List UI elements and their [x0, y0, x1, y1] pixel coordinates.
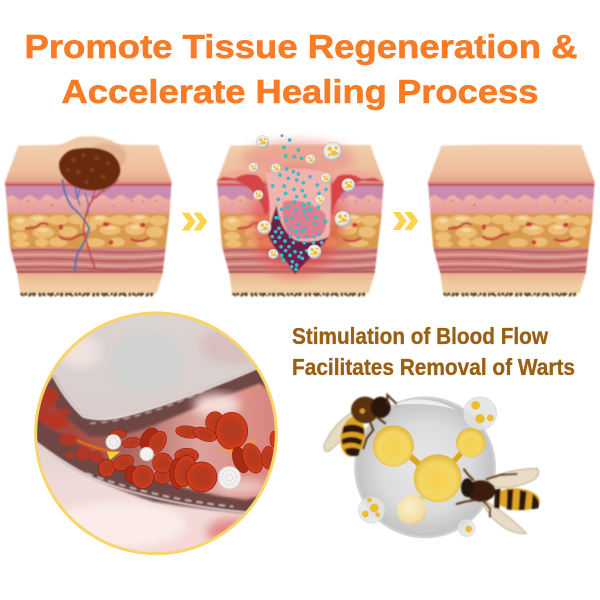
circle border	[36, 313, 276, 554]
large bubble	[354, 397, 496, 538]
vessel wall	[33, 368, 287, 513]
bubbles with gold molecules	[256, 135, 269, 148]
bee top left	[324, 395, 396, 458]
gold molecule	[373, 425, 485, 525]
skin block: wound with active molecules	[212, 134, 389, 296]
lumen	[33, 383, 287, 500]
red inflammation	[238, 160, 355, 287]
title: Promote Tissue Regeneration &	[24, 28, 578, 65]
skin block: healed skin	[423, 145, 600, 296]
small bubbles	[463, 397, 497, 430]
circle: blood vessel with red cells	[30, 308, 287, 558]
far blood cells	[37, 387, 103, 463]
title: Accelerate Healing Process	[62, 73, 538, 110]
subtitle: Stimulation of Blood Flow	[292, 323, 549, 349]
title	[24, 28, 578, 110]
wart	[59, 148, 120, 190]
subtitle	[292, 323, 575, 380]
pink tint on top surface	[242, 140, 355, 177]
crater	[265, 168, 331, 274]
white blood cells	[106, 435, 241, 489]
backdrop	[38, 314, 256, 552]
bump around wart	[55, 136, 128, 160]
red blood cells	[99, 412, 278, 492]
teal dots	[270, 134, 328, 271]
wound lips	[217, 168, 382, 274]
vessels	[63, 175, 118, 272]
arrow: first chevrons	[182, 213, 207, 231]
molecule bubble with bees	[324, 395, 541, 538]
arrow: second chevrons	[393, 212, 418, 230]
bee bottom right	[457, 468, 541, 534]
skin block: wart before treatment	[0, 136, 177, 296]
vessel highlight edges	[53, 368, 257, 419]
